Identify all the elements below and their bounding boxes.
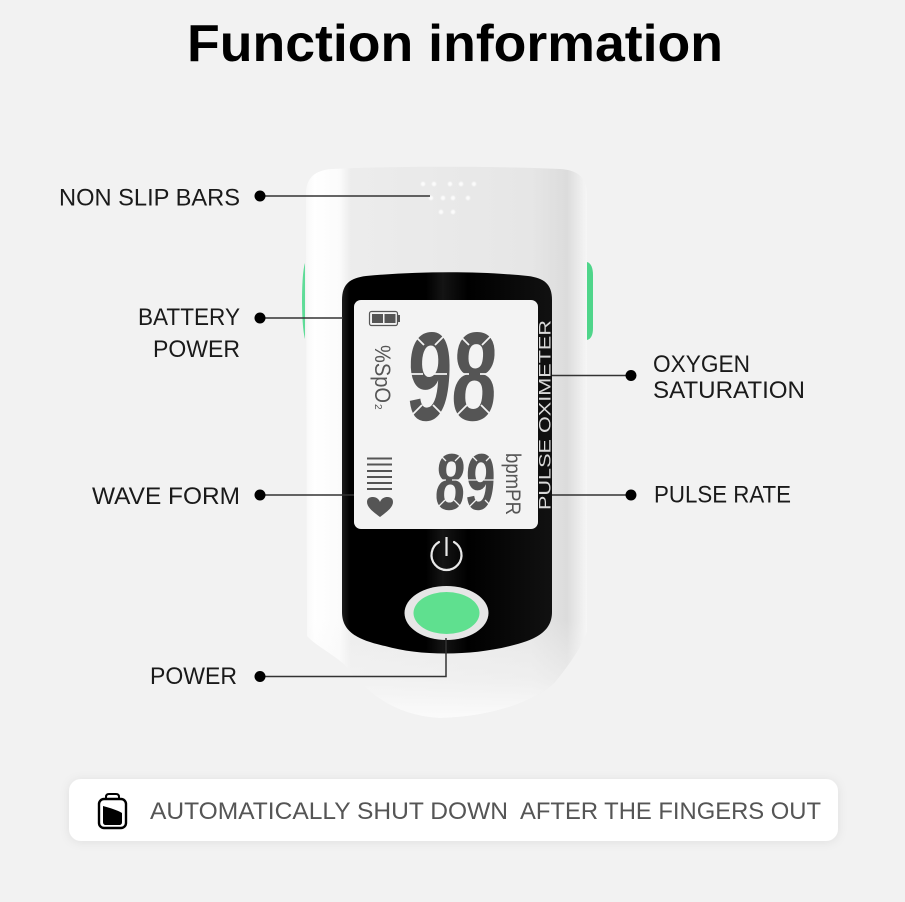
callout: wave form	[92, 483, 354, 510]
lcd screen	[354, 300, 538, 529]
left green side button	[302, 263, 305, 339]
spo2 unit label: %SpO	[370, 345, 395, 403]
right green side button	[587, 262, 593, 340]
oxygen reading 98: 98	[404, 306, 501, 447]
power symbol	[432, 537, 462, 570]
lower body fade	[306, 620, 587, 718]
spo2 subscript: 2	[372, 404, 383, 410]
pulse reading 89: 89	[433, 438, 498, 526]
callout: power: POWER	[150, 663, 237, 690]
battery level icon	[370, 312, 400, 326]
callout: oxygen saturation	[552, 351, 805, 404]
title: Function information	[187, 15, 723, 73]
callout: battery power: BATTERY	[138, 304, 240, 331]
bpm pr unit label: bpmPR	[501, 453, 524, 515]
notice text	[150, 798, 821, 825]
callout: oxygen saturation: OXYGEN	[653, 351, 750, 378]
callout: battery power: POWER	[153, 336, 240, 363]
callout: pulse rate	[552, 482, 791, 508]
waveform bars	[367, 458, 392, 489]
callout: wave form: WAVE FORM	[92, 483, 240, 510]
heart icon	[367, 497, 393, 517]
power button	[404, 586, 488, 640]
icon: battery with finger chamber	[99, 794, 126, 828]
callout: oxygen saturation: SATURATION	[653, 377, 805, 404]
callout: non slip bars: NON SLIP BARS	[59, 184, 240, 212]
callout: non slip bars	[59, 184, 430, 212]
pulse oximeter brand text: PULSE OXIMETER	[536, 320, 554, 510]
pulse oximeter device	[302, 167, 593, 718]
callout: battery power	[138, 304, 343, 363]
callout: pulse rate: PULSE RATE	[654, 482, 791, 508]
non slip bars dots	[421, 182, 476, 214]
callout: power	[150, 638, 446, 690]
notice text: AFTER THE FINGERS OUT	[520, 798, 821, 825]
notice text: AUTOMATICALLY SHUT DOWN	[150, 798, 508, 825]
black front panel	[342, 272, 552, 654]
device body	[306, 167, 587, 718]
auto shutdown notice bar	[69, 779, 838, 841]
